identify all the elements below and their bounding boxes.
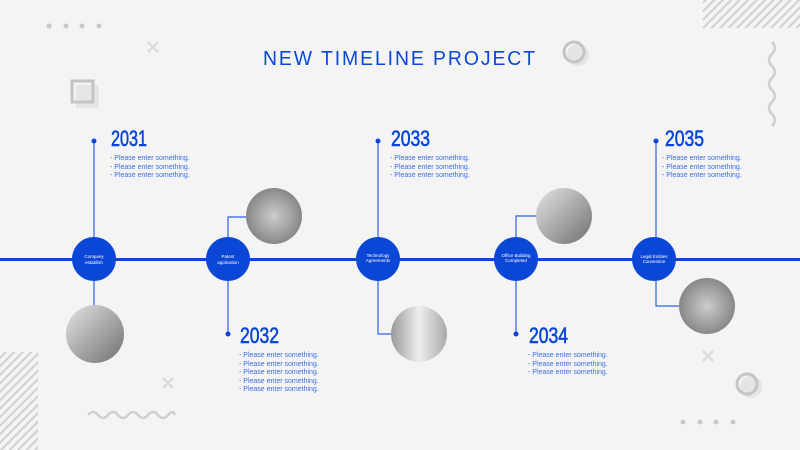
text blocks: - Please enter something. [390, 155, 470, 162]
decor: zigzag [769, 42, 775, 126]
decor: stripes bottom left [0, 352, 38, 450]
decor: stripes top right [703, 0, 800, 28]
text blocks: - Please enter something. [662, 172, 742, 179]
nodes: Technology [367, 253, 390, 258]
nodes: Patent [221, 254, 235, 259]
text blocks: - Please enter something. [239, 386, 319, 393]
text blocks [110, 126, 742, 393]
timeline axis [0, 258, 800, 261]
text blocks: 2033 [391, 126, 430, 151]
text blocks: - Please enter something. [528, 352, 608, 359]
text blocks: 2034 [529, 323, 568, 348]
text blocks: - Please enter something. [239, 369, 319, 376]
title: NEW TIMELINE PROJECT [263, 48, 537, 70]
nodes: Company [84, 254, 104, 259]
text blocks: - Please enter something. [528, 361, 608, 368]
text blocks: - Please enter something. [662, 164, 742, 171]
text blocks: - Please enter something. [390, 172, 470, 179]
text blocks: - Please enter something. [110, 172, 190, 179]
dots [92, 138, 658, 336]
decor: dots [46, 24, 736, 424]
decor: crosses [148, 42, 713, 388]
text blocks: - Please enter something. [528, 369, 608, 376]
text blocks: 2035 [665, 126, 704, 151]
text blocks: - Please enter something. [390, 164, 470, 171]
decor: squares [72, 81, 99, 108]
text blocks: - Please enter something. [110, 164, 190, 171]
nodes: Office Building [502, 253, 531, 258]
text blocks: - Please enter something. [239, 361, 319, 368]
nodes: establish [85, 260, 103, 265]
nodes: Conversion [643, 259, 666, 264]
nodes: Legal Entities [640, 254, 668, 259]
decor: wave [88, 412, 175, 418]
decor: rings [564, 42, 762, 398]
nodes: Completed [505, 258, 527, 263]
text blocks: - Please enter something. [110, 155, 190, 162]
text blocks: 2032 [240, 323, 279, 348]
nodes: application [217, 260, 239, 265]
nodes: Agreements [366, 258, 391, 263]
text blocks: - Please enter something. [239, 378, 319, 385]
photos [66, 188, 735, 363]
text blocks: - Please enter something. [662, 155, 742, 162]
connectors [94, 141, 680, 334]
text blocks: 2031 [111, 126, 147, 151]
nodes [72, 237, 676, 281]
text blocks: - Please enter something. [239, 352, 319, 359]
